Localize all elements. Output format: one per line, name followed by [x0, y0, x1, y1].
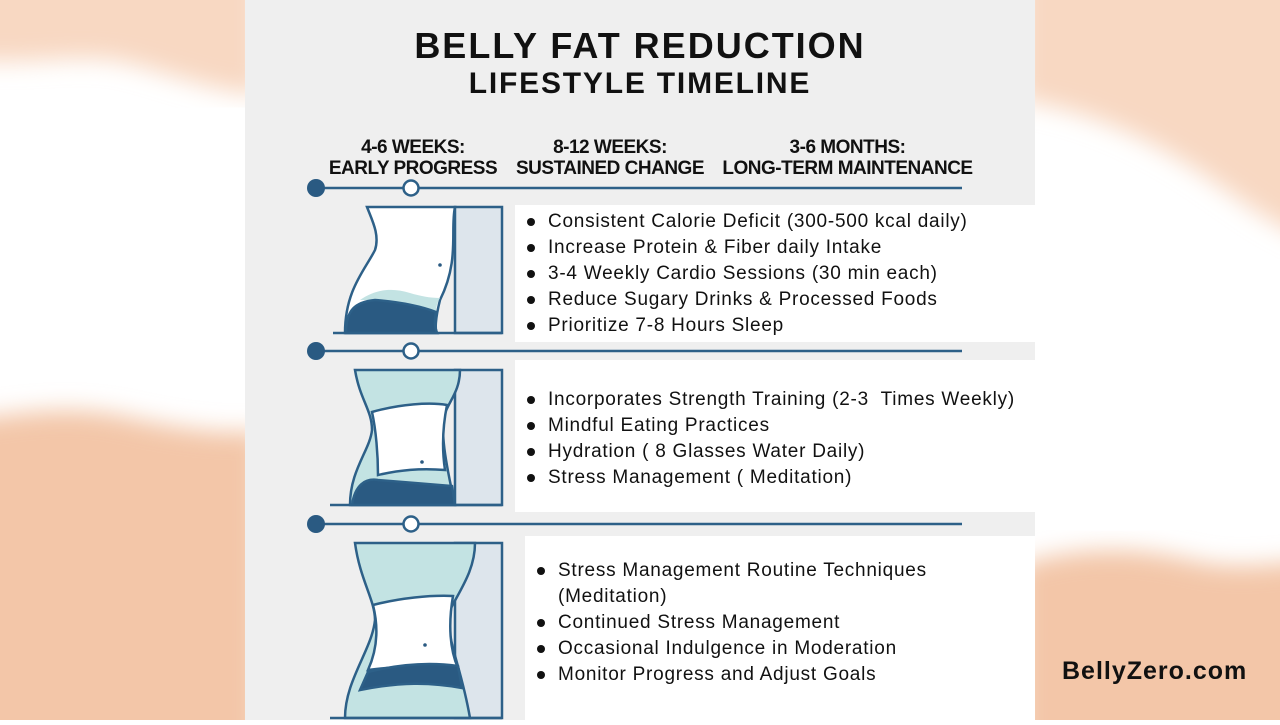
title [414, 25, 866, 100]
figure 1 [333, 207, 502, 333]
panel 3 list: (Meditation) [558, 586, 667, 607]
panel 1 list: Reduce Sugary Drinks & Processed Foods [548, 289, 938, 310]
central panel [245, 0, 1035, 720]
phase heading 1: 4-6 WEEKS: [361, 137, 465, 158]
panel 2 list: Incorporates Strength Training (2-3 Times Weekly) [548, 389, 1015, 410]
panel 1 list [515, 205, 1035, 342]
panel 2 list [515, 360, 1035, 512]
panel 3 list: Stress Management Routine Techniques [558, 560, 927, 581]
phase heading 1 [329, 137, 497, 179]
title: LIFESTYLE TIMELINE [469, 67, 811, 100]
phase heading 3: 3-6 MONTHS: [790, 137, 905, 158]
panel 1 list: Prioritize 7-8 Hours Sleep [548, 315, 784, 336]
phase heading 3: LONG-TERM MAINTENANCE [722, 158, 973, 179]
panel 2 list: Hydration ( 8 Glasses Water Daily) [548, 441, 865, 462]
phase heading 2 [516, 137, 704, 179]
title: BELLY FAT REDUCTION [414, 25, 866, 66]
phase heading 1: EARLY PROGRESS [329, 158, 497, 179]
brand: BellyZero.com [1062, 657, 1247, 685]
panel 3 list [525, 536, 1035, 720]
panel 3 list: Monitor Progress and Adjust Goals [558, 664, 876, 685]
panel 1 list: Increase Protein & Fiber daily Intake [548, 237, 882, 258]
figure 2 [330, 370, 502, 505]
phase heading 2: 8-12 WEEKS: [553, 137, 667, 158]
panel 2 list: Stress Management ( Meditation) [548, 467, 852, 488]
panel 1 list: Consistent Calorie Deficit (300-500 kcal daily) [548, 211, 968, 232]
figure 3 [330, 543, 502, 718]
panel 1 list: 3-4 Weekly Cardio Sessions (30 min each) [548, 263, 938, 284]
panel 2 list: Mindful Eating Practices [548, 415, 770, 436]
phase heading 2: SUSTAINED CHANGE [516, 158, 704, 179]
panel 3 list: Continued Stress Management [558, 612, 840, 633]
panel 3 list: Occasional Indulgence in Moderation [558, 638, 897, 659]
phase heading 3 [722, 137, 973, 179]
timelines and figures [307, 179, 962, 720]
